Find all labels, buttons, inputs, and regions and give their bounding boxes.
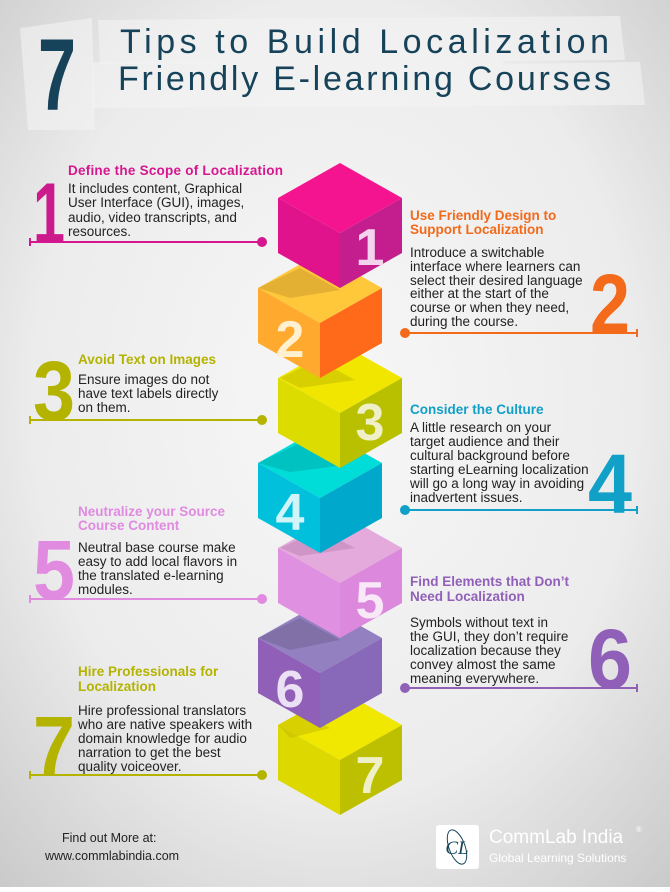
tip 7: Localization: [78, 679, 156, 694]
cube 7: [278, 690, 402, 815]
tip 1: [30, 163, 283, 262]
tip 7: narration to get the best: [78, 745, 221, 760]
tip 6: the GUI, they don’t require: [410, 629, 568, 644]
cube 3: 3: [356, 394, 384, 452]
cube 1: 1: [356, 219, 384, 277]
logo: [436, 825, 642, 869]
cube 4: [258, 428, 382, 553]
cube 5: 5: [356, 572, 384, 630]
tip 3: Ensure images do not: [78, 372, 210, 387]
tip 7: quality voiceover.: [78, 759, 182, 774]
tip 2: either at the start of the: [410, 286, 549, 301]
tip 6: [400, 574, 637, 706]
cube 2: 2: [276, 311, 304, 369]
cube 4: 4: [276, 484, 305, 542]
tip 5: the translated e-learning: [78, 568, 224, 583]
tip 4: cultural background before: [410, 448, 570, 463]
tip 3: on them.: [78, 400, 131, 415]
tip 7: Hire professional translators: [78, 703, 246, 718]
tip 5: Neutralize your Source: [78, 504, 226, 519]
tip 4: target audience and their: [410, 434, 560, 449]
tip 2: [400, 208, 637, 351]
tip 7: 7: [33, 699, 75, 793]
tip 6: Find Elements that Don’t: [410, 574, 570, 589]
tip 4: 4: [588, 437, 632, 531]
logo: Global Learning Solutions: [489, 851, 626, 865]
tip 7: who are native speakers with: [77, 717, 252, 732]
tip 1: User Interface (GUI), images,: [68, 195, 244, 210]
tip 3: Avoid Text on Images: [78, 352, 216, 367]
tip 6: Need Localization: [410, 589, 525, 604]
cube 7: 7: [356, 747, 384, 805]
tip 6: localization because they: [410, 643, 561, 658]
tip 5: easy to add local flavors in: [78, 554, 237, 569]
tip 7: [30, 664, 267, 793]
cube 6: 6: [276, 661, 304, 719]
logo: CL: [445, 838, 469, 859]
tip 3: [30, 344, 267, 438]
tip 7: Hire Professionals for: [78, 664, 219, 679]
tip 6: convey almost the same: [410, 657, 556, 672]
tip 1: 1: [33, 166, 65, 262]
cube 1: [278, 163, 402, 288]
title: 7: [38, 18, 76, 132]
cube 5: [278, 513, 402, 638]
tip 3: have text labels directly: [78, 386, 219, 401]
tip 2: select their desired language: [410, 273, 583, 288]
tip 4: [400, 402, 637, 531]
logo: CommLab India: [489, 827, 624, 848]
footer link: [44, 831, 179, 863]
tip 1: Define the Scope of Localization: [68, 163, 283, 178]
logo: ®: [636, 825, 642, 834]
tip 5: Neutral base course make: [78, 540, 236, 555]
cube 3: [278, 343, 402, 468]
tip 5: modules.: [78, 582, 133, 597]
cube 6: [258, 603, 382, 728]
title: Tips to Build Localization: [120, 23, 610, 61]
tip 2: Use Friendly Design to: [410, 208, 556, 223]
tip 1: resources.: [68, 224, 131, 239]
footer link: www.commlabindia.com: [44, 849, 179, 863]
title: Friendly E-learning Courses: [118, 60, 612, 98]
cube 2: [258, 253, 382, 378]
tip 7: domain knowledge for audio: [78, 731, 247, 746]
tip 4: inadvertent issues.: [410, 490, 523, 505]
tip 2: Support Localization: [410, 222, 544, 237]
tip 6: 6: [588, 612, 632, 706]
cube stack: [258, 163, 402, 815]
footer link: Find out More at:: [62, 831, 156, 845]
tip 5: Course Content: [78, 518, 180, 533]
tip 2: course or when they need,: [410, 300, 569, 315]
tip 4: will go a long way in avoiding: [409, 476, 584, 491]
tip 2: Introduce a switchable: [410, 245, 544, 260]
tip 5: [30, 504, 267, 617]
tip 6: Symbols without text in: [410, 615, 548, 630]
tip 6: meaning everywhere.: [410, 671, 539, 686]
tip 2: 2: [590, 257, 630, 351]
tip 2: interface where learners can: [410, 259, 580, 274]
tip 2: during the course.: [410, 314, 518, 329]
title: [20, 16, 645, 132]
tip 1: audio, video transcripts, and: [68, 210, 237, 225]
tip 4: starting eLearning localization: [410, 462, 589, 477]
tip 4: A little research on your: [410, 420, 552, 435]
tip 4: Consider the Culture: [410, 402, 544, 417]
tip 1: It includes content, Graphical: [68, 181, 242, 196]
tip 5: 5: [33, 523, 75, 617]
tip 3: 3: [33, 344, 75, 438]
